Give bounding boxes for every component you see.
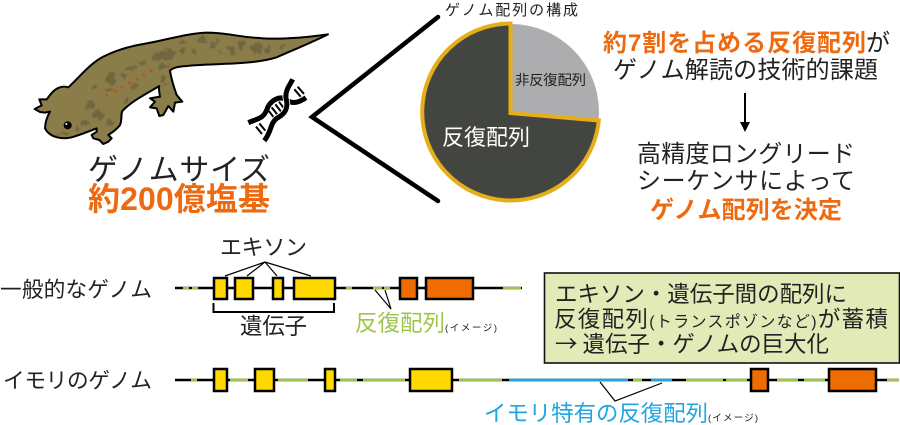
row label: typical genome: 一般的なゲノム	[0, 277, 152, 302]
repeat sequence label: 反復配列	[355, 311, 445, 336]
zoom lines	[312, 17, 438, 201]
illustration: newt	[35, 33, 328, 144]
text: repeat sequence challenge: 約7割を占める反復配列	[603, 30, 866, 57]
newt genome track	[175, 369, 899, 391]
pie chart: genome composition: 反復配列	[442, 125, 530, 150]
heading: genome size	[88, 154, 270, 217]
row label: newt genome: イモリのゲノム	[3, 368, 152, 393]
text: long read sequencing: 高精度ロングリード	[637, 141, 855, 168]
text: repeat sequence challenge	[603, 30, 890, 84]
newt-specific repeat label: (イメージ)	[708, 413, 758, 424]
exon label: エキソン	[220, 235, 307, 260]
text: long read sequencing	[637, 141, 855, 224]
heading: genome size: 約200億塩基	[88, 181, 270, 217]
text: repeat sequence challenge: ゲノム解読の技術的課題	[613, 57, 878, 84]
text: long read sequencing: ゲノム配列を決定	[650, 197, 842, 224]
icon: DNA helix	[248, 79, 306, 141]
arrow: down	[740, 93, 750, 132]
callout	[544, 273, 900, 363]
pie chart: genome composition: 非反復配列	[515, 72, 586, 89]
pie chart title: ゲノム配列の構成	[445, 2, 578, 19]
gene bracket: 遺伝子	[240, 314, 307, 339]
newt-specific repeat label	[484, 382, 758, 425]
callout: エキソン・遺伝子間の配列に	[555, 282, 847, 307]
exon label	[220, 235, 311, 276]
text: long read sequencing: シーケンサによって	[637, 168, 855, 195]
typical genome track	[175, 278, 522, 299]
gene bracket	[214, 303, 334, 339]
repeat sequence label: (イメージ)	[445, 323, 497, 334]
text: repeat sequence challenge: が	[866, 30, 890, 57]
pie chart: genome composition	[422, 24, 599, 200]
callout: 反復配列(トランスポゾンなど)が蓄積	[554, 307, 888, 332]
heading: genome size: ゲノムサイズ	[88, 154, 270, 187]
repeat sequence label	[355, 290, 497, 336]
callout: → 遺伝子・ゲノムの巨大化	[555, 327, 829, 359]
